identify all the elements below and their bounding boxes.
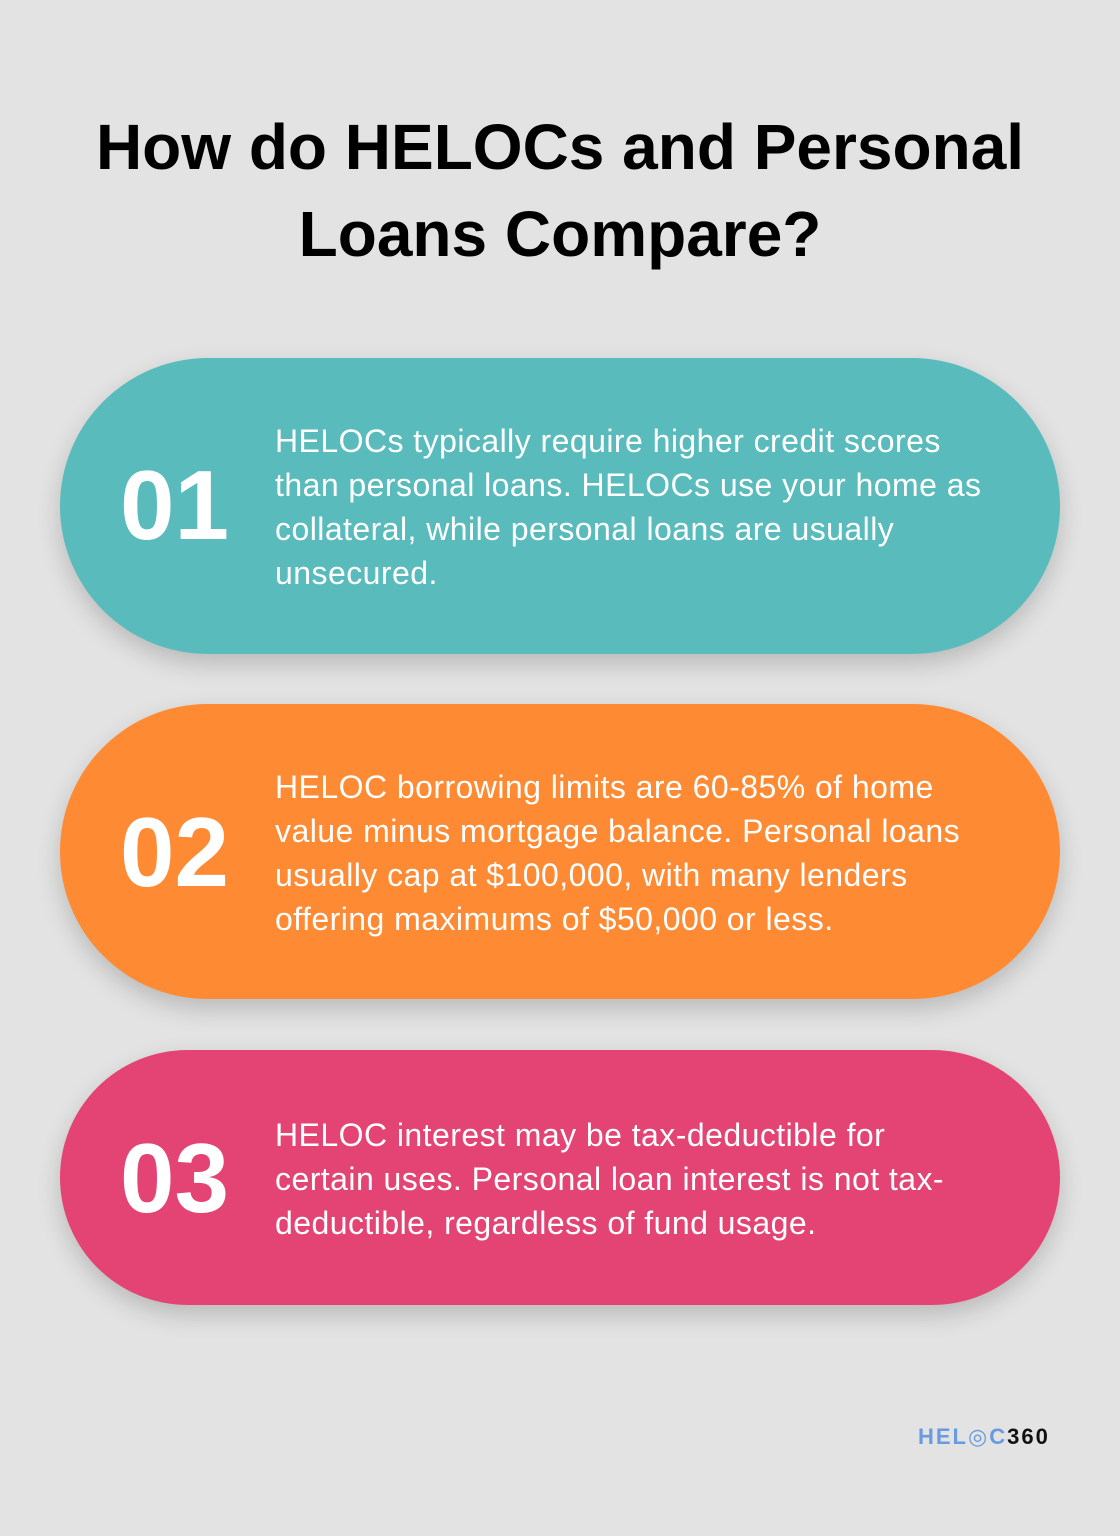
title <box>96 111 1024 270</box>
number 03: 03 <box>120 1123 229 1233</box>
text 02: usually cap at $100,000, with many lenders <box>275 857 908 893</box>
text 01: HELOCs typically require higher credit scores <box>275 423 941 459</box>
text 03: certain uses. Personal loan interest is not tax- <box>275 1161 944 1197</box>
text 02: value minus mortgage balance. Personal loans <box>275 813 960 849</box>
number 02: 02 <box>120 797 229 907</box>
text 02: offering maximums of $50,000 or less. <box>275 901 834 937</box>
logo: HEL◎C360 <box>918 1424 1050 1449</box>
text 01: than personal loans. HELOCs use your home as <box>275 467 981 503</box>
text 02: HELOC borrowing limits are 60-85% of home <box>275 769 934 805</box>
number 01: 01 <box>120 450 229 560</box>
title: Loans Compare? <box>299 198 821 270</box>
text 03: deductible, regardless of fund usage. <box>275 1205 816 1241</box>
text 03 <box>275 1117 944 1241</box>
panel: 01 <box>60 358 1060 654</box>
text 03: HELOC interest may be tax-deductible for <box>275 1117 885 1153</box>
panel: 03 <box>60 1050 1060 1305</box>
text 01 <box>275 423 981 591</box>
text 01: unsecured. <box>275 555 438 591</box>
text 01: collateral, while personal loans are usually <box>275 511 894 547</box>
title: How do HELOCs and Personal <box>96 111 1024 183</box>
panel: 02 <box>60 704 1060 999</box>
text 02 <box>275 769 960 937</box>
